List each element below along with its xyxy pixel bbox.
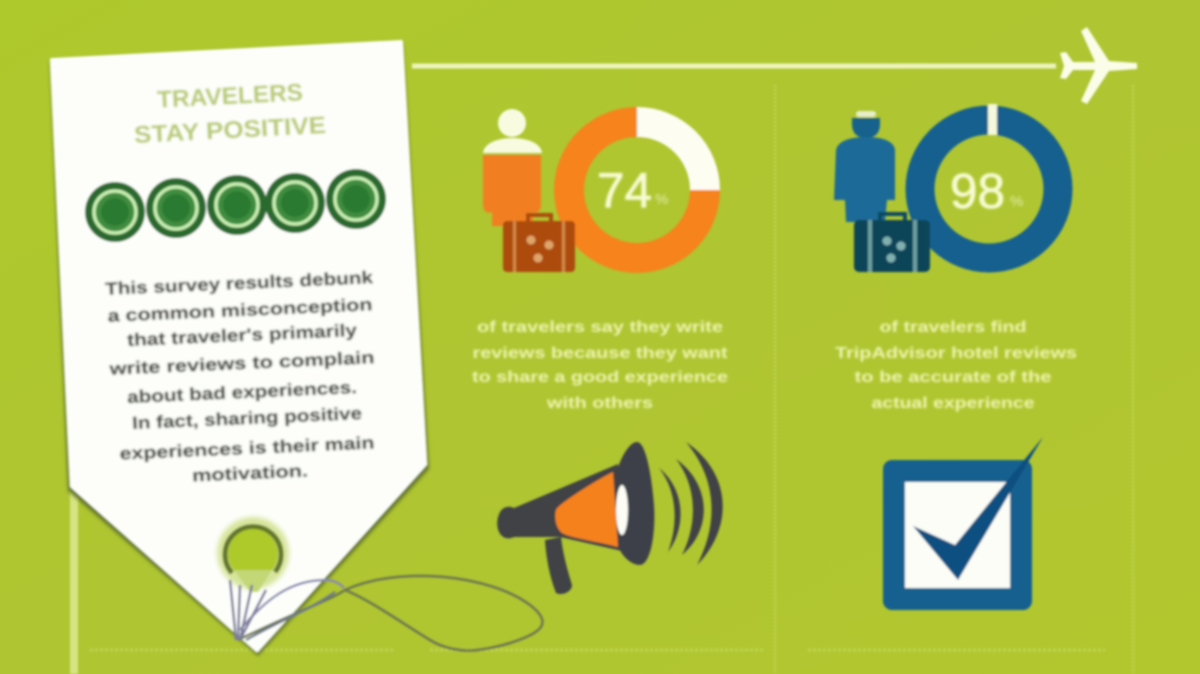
panel: luggage tag xyxy=(50,42,429,656)
icon: airplane xyxy=(1060,27,1137,104)
donut chart: 98% xyxy=(920,104,1058,258)
description xyxy=(835,319,1077,412)
stat: 74 percent xyxy=(472,109,728,412)
tag body text: motivation. xyxy=(192,460,308,486)
description: of travelers find xyxy=(880,319,1026,336)
tag body text: about bad experiences. xyxy=(127,377,357,407)
icon: megaphone xyxy=(497,442,723,594)
description: with others xyxy=(546,395,653,412)
tag heading: STAY POSITIVE xyxy=(133,112,327,149)
description: actual experience xyxy=(872,395,1035,412)
tag body text: experiences is their main xyxy=(119,432,375,464)
flight path line xyxy=(412,64,1056,68)
tag string xyxy=(230,576,543,650)
tag body text: This survey results debunk xyxy=(105,267,374,299)
value 74%: % xyxy=(655,191,668,208)
icon: checkbox with tick xyxy=(883,437,1043,610)
description: of travelers say they write xyxy=(477,319,723,336)
icon: suitcase orange xyxy=(503,215,575,272)
value 98%: % xyxy=(1010,193,1023,210)
donut chart: 74% xyxy=(569,122,705,258)
description: to share a good experience xyxy=(472,369,728,386)
tag body text: write reviews to complain xyxy=(108,347,375,379)
description: to be accurate of the xyxy=(854,369,1052,386)
tag body text: In fact, sharing positive xyxy=(132,403,363,433)
description xyxy=(472,319,728,412)
tag body text: that traveler's primarily xyxy=(127,320,358,350)
stat: 98 percent xyxy=(834,104,1077,412)
description: TripAdvisor hotel reviews xyxy=(835,345,1077,362)
tag body text xyxy=(105,267,375,486)
icon: traveler blue xyxy=(834,111,895,222)
icon: suitcase blue xyxy=(854,214,930,272)
tag heading xyxy=(133,79,327,149)
tag eyelet xyxy=(217,517,289,592)
five circle rating xyxy=(85,169,386,242)
tag body text: a common misconception xyxy=(107,294,373,326)
icon: traveler orange xyxy=(483,109,542,226)
value 74%: 74 xyxy=(597,164,652,218)
value 98%: 98 xyxy=(950,165,1005,219)
tag heading: TRAVELERS xyxy=(156,79,304,114)
description: reviews because they want xyxy=(472,345,728,362)
